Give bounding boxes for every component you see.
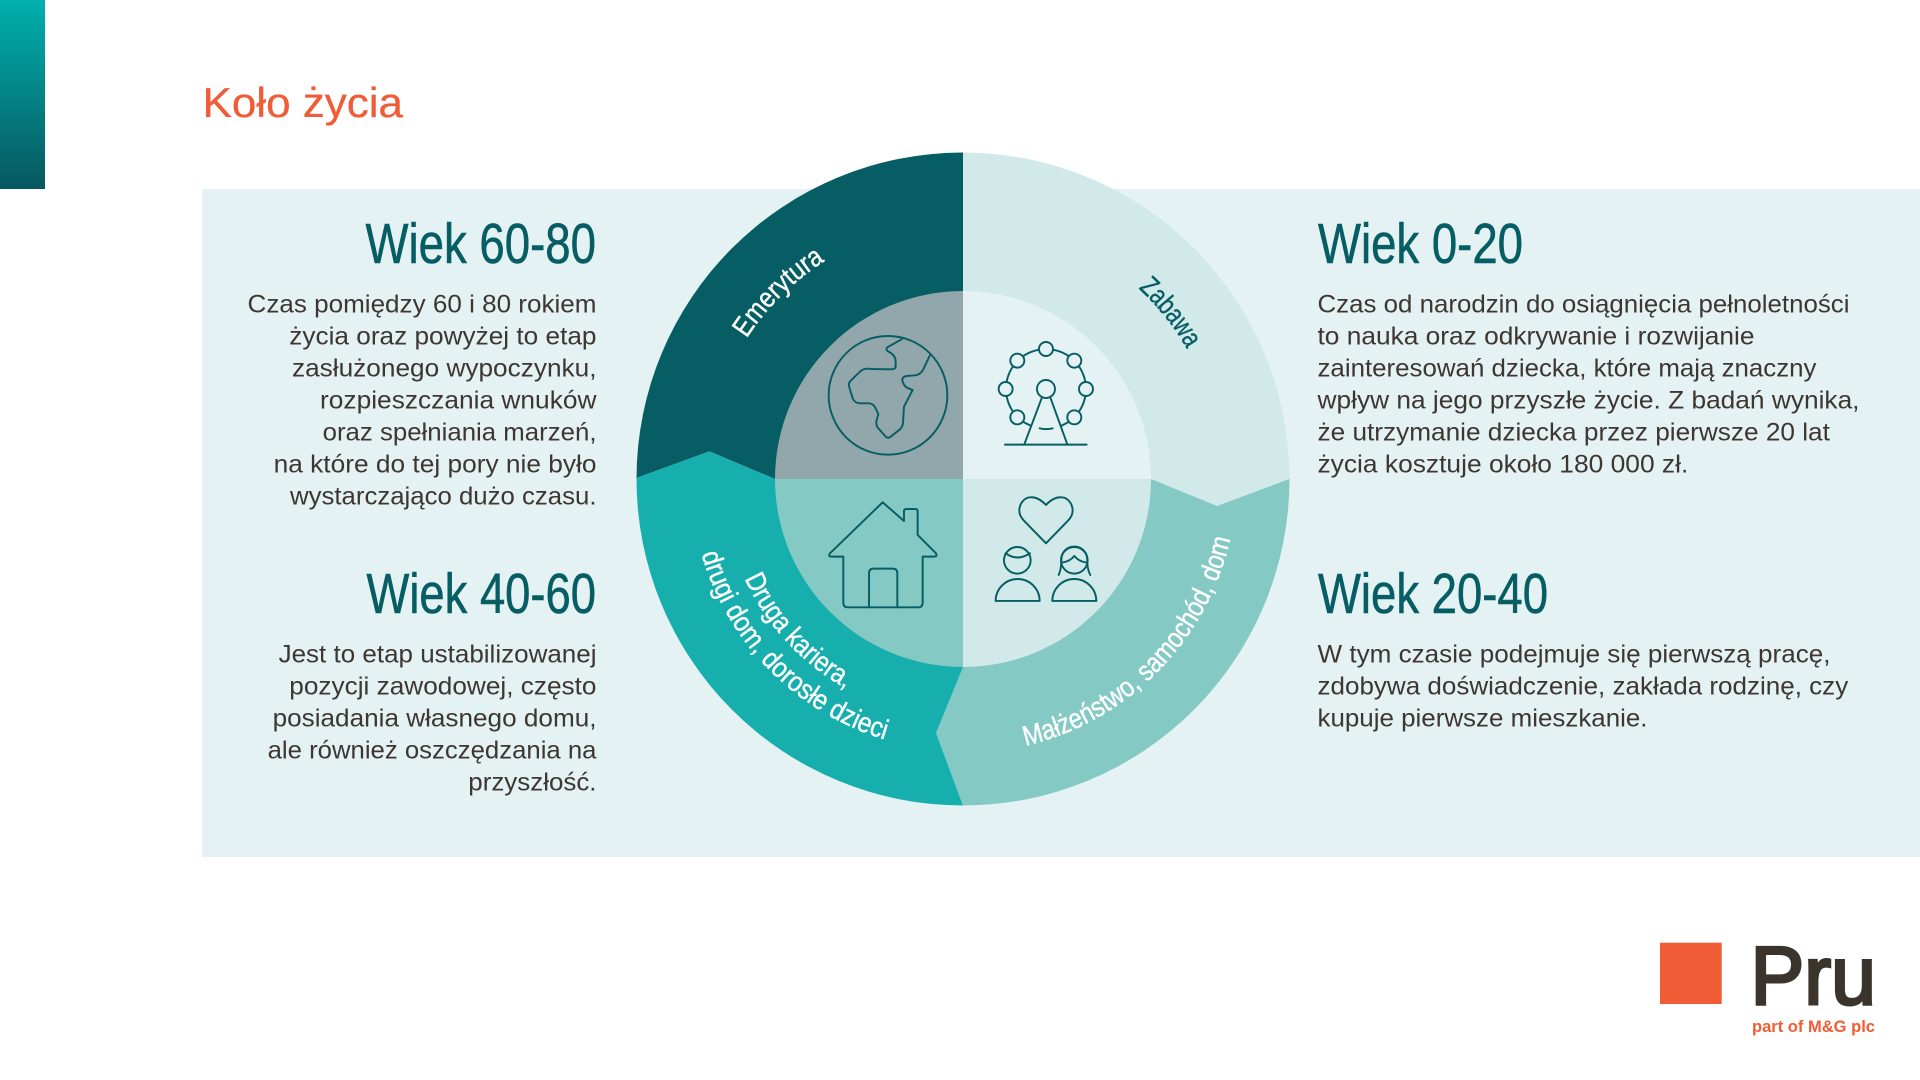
segment: Emerytura <box>636 152 963 479</box>
logo tagline: part of M&G plc <box>1752 1017 1875 1036</box>
segment: Zabawa <box>963 152 1290 506</box>
icon: globe <box>829 336 947 455</box>
label: drugi dom, dorosłe dzieci: drugi dom, dorosłe dzieci <box>702 552 890 740</box>
body: Wiek 0-20: Czas od narodzin do osiągnięcia pełnoletności <box>1318 290 1850 318</box>
body: Wiek 0-20: to nauka oraz odkrywanie i rozwijanie <box>1318 322 1754 350</box>
icon: ferris wheel <box>999 342 1093 445</box>
title: Koło życia <box>202 79 404 126</box>
body: Wiek 40-60 <box>268 640 597 796</box>
gradient corner bar <box>0 0 45 189</box>
logo square <box>1660 943 1722 1004</box>
body: Wiek 0-20 <box>1316 290 1860 478</box>
body: Wiek 60-80: życia oraz powyżej to etap <box>289 322 596 350</box>
text block: Wiek 60-80 <box>248 212 597 510</box>
background panel <box>202 189 1920 857</box>
text block: Wiek 40-60 <box>268 562 597 796</box>
body: Wiek 0-20: wpływ na jego przyszłe życie. Z badań wynika, <box>1316 386 1860 414</box>
heading: Wiek 60-80: Wiek 60-80 <box>366 212 596 276</box>
body: Wiek 60-80: Czas pomiędzy 60 i 80 rokiem <box>248 290 596 318</box>
heading: Wiek 0-20: Wiek 0-20 <box>1318 212 1523 276</box>
body: Wiek 0-20: zainteresowań dziecka, które mają znaczny <box>1318 354 1817 382</box>
inner quadrant: globe background <box>775 291 963 479</box>
inner quadrant: couple background <box>963 479 1151 667</box>
body: Wiek 40-60: Jest to etap ustabilizowanej <box>279 640 596 668</box>
label: Zabawa: Zabawa <box>1138 275 1198 350</box>
life wheel chart <box>636 152 1290 806</box>
body: Wiek 40-60: pozycji zawodowej, często <box>289 672 596 700</box>
body: Wiek 0-20: życia kosztuje około 180 000 zł. <box>1318 450 1688 478</box>
body: Wiek 60-80: oraz spełniania marzeń, <box>323 418 596 446</box>
inner quadrant: house background <box>775 479 963 667</box>
icon: couple with heart <box>996 497 1096 601</box>
segment: Małżeństwo <box>936 479 1290 806</box>
body: Wiek 40-60: przyszłość. <box>468 768 596 796</box>
body: Wiek 20-40 <box>1318 640 1849 732</box>
heading: Wiek 20-40: Wiek 20-40 <box>1318 562 1548 626</box>
body: Wiek 20-40: W tym czasie podejmuje się pierwszą pracę, <box>1318 640 1830 668</box>
body: Wiek 20-40: zdobywa doświadczenie, zakłada rodzinę, czy <box>1318 672 1849 700</box>
body: Wiek 60-80 <box>248 290 597 510</box>
icon: house <box>829 502 937 607</box>
logo wordmark: Pru <box>1750 929 1876 1022</box>
label: Emerytura: Emerytura <box>732 250 825 338</box>
label: Małżeństwo, samochód, dom: Małżeństwo, samochód, dom <box>1022 537 1230 746</box>
body: Wiek 60-80: zasłużonego wypoczynku, <box>292 354 596 382</box>
body: Wiek 40-60: posiadania własnego domu, <box>273 704 596 732</box>
logo: Pru part of M&G plc <box>1660 929 1876 1036</box>
body: Wiek 0-20: że utrzymanie dziecka przez pierwsze 20 lat <box>1318 418 1830 446</box>
body: Wiek 20-40: kupuje pierwsze mieszkanie. <box>1318 704 1648 732</box>
body: Wiek 60-80: na które do tej pory nie było <box>274 450 596 478</box>
body: Wiek 60-80: rozpieszczania wnuków <box>320 386 597 414</box>
text block: Wiek 0-20 <box>1316 212 1860 478</box>
segment: Druga kariera <box>636 451 963 806</box>
text block: Wiek 20-40 <box>1318 562 1849 732</box>
label: Druga kariera: Druga kariera, <box>745 571 846 690</box>
body: Wiek 60-80: wystarczająco dużo czasu. <box>289 482 596 510</box>
body: Wiek 40-60: ale również oszczędzania na <box>268 736 597 764</box>
heading: Wiek 40-60: Wiek 40-60 <box>366 562 596 626</box>
inner quadrant: ferris wheel background <box>963 291 1151 479</box>
